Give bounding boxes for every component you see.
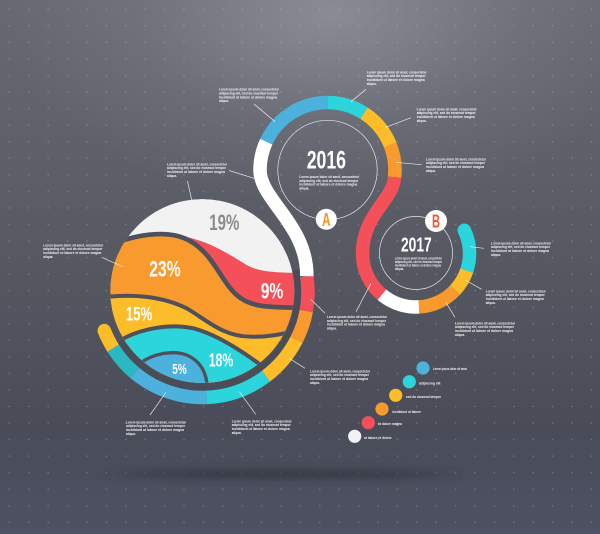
ribbon: red S-curve bbox=[362, 177, 395, 295]
text block: pie ring blue: aliqua. bbox=[126, 432, 136, 436]
text block: B yellow: adipiscing elit, sed do eiusmod tempor bbox=[486, 293, 545, 297]
badge A: A bbox=[322, 210, 331, 230]
pie chart bbox=[110, 199, 294, 383]
text block: ribbon orange 2016: incididunt ut labore et dolore magna bbox=[426, 165, 485, 169]
pie label 18%: 18% bbox=[209, 350, 234, 371]
text block: upper pie white: Lorem ipsum dolor sit amet, consectetur bbox=[167, 162, 228, 166]
text block: B yellow: Lorem ipsum dolor sit amet, consectetur bbox=[486, 289, 546, 293]
badge A bbox=[316, 209, 337, 230]
ribbon: blue bbox=[135, 373, 207, 397]
text block: ribbon yellow 2016: adipiscing elit, sed do eiusmod tempor bbox=[417, 111, 476, 115]
text block: pie ring blue: Lorem ipsum dolor sit amet, consectetur bbox=[126, 420, 187, 424]
text block: upper pie white: aliqua. bbox=[167, 174, 177, 178]
text block: ribbon red lower: adipiscing elit, sed do eiusmod tempor bbox=[327, 319, 387, 323]
text block: ribbon blue 2016: Lorem ipsum dolor sit amet, consectetur bbox=[219, 88, 280, 92]
pie separators bbox=[110, 232, 293, 383]
legend item: white: ut labore et dolore bbox=[364, 436, 392, 440]
ribbon: teal bbox=[113, 348, 135, 373]
text block: B cyan: incididunt ut labore et dolore magna bbox=[491, 249, 550, 253]
text block: B orange: aliqua. bbox=[455, 333, 465, 337]
text block: B cyan: adipiscing elit, sed do eiusmod tempor bbox=[491, 245, 551, 249]
legend item: cyan: adipiscing elit bbox=[419, 382, 441, 386]
circle B outline bbox=[380, 216, 452, 290]
text block: pie orange: adipiscing elit, sed do eiusmod tempor bbox=[43, 247, 103, 251]
text block: ribbon blue 2016: aliqua. bbox=[219, 99, 229, 103]
text block: ribbon orange 2016 bbox=[426, 157, 487, 173]
text block: pie ring blue: adipiscing elit, sed do eiusmod tempor bbox=[126, 424, 186, 428]
text block: circle B description bbox=[395, 256, 442, 271]
pie label 15%: 15% bbox=[126, 304, 152, 326]
text block: ribbon cyan 2016: incididunt ut labore et dolore magna bbox=[367, 78, 426, 82]
text block: B orange bbox=[455, 321, 516, 337]
text block: B yellow bbox=[486, 289, 546, 305]
text block: B cyan bbox=[491, 241, 552, 257]
text block: upper pie white: adipiscing elit, sed do eiusmod tempor bbox=[167, 166, 227, 170]
ribbon: yellow bbox=[266, 340, 297, 376]
ribbon: yellow start with round cap bbox=[104, 331, 113, 348]
text block: ribbon red lower bbox=[327, 315, 388, 331]
legend item: blue: Lorem ipsum dolor sit amet bbox=[433, 367, 468, 371]
text block: ribbon blue 2016: adipiscing elit, sed do eiusmod tempor bbox=[219, 92, 279, 96]
ribbon: yellow arc A bbox=[364, 113, 390, 145]
text block: pie ring blue: incididunt ut labore et dolore magna bbox=[126, 428, 185, 432]
text block: circle A description: Lorem ipsum dolor sit amet, consectetur bbox=[299, 175, 360, 179]
text block: upper pie white: incididunt ut labore et dolore magna bbox=[167, 170, 226, 174]
text block: circle B description: Lorem ipsum dolor sit amet, consectetur bbox=[395, 256, 442, 260]
ribbon: blue arc A bbox=[266, 102, 328, 142]
text block: ribbon cyan 2016 bbox=[367, 70, 427, 86]
pie label 9%: 9% bbox=[261, 278, 283, 303]
text block: pie orange bbox=[43, 243, 104, 259]
text block: pie ring cyan bbox=[232, 419, 292, 435]
text block: pie ring yellow bbox=[310, 369, 371, 385]
text block: pie ring yellow: aliqua. bbox=[310, 381, 320, 385]
text block: ribbon cyan 2016: aliqua. bbox=[367, 82, 377, 86]
continuous ribbon through both circles bbox=[104, 102, 470, 397]
pie label 23%: 23% bbox=[149, 257, 181, 282]
pie label 19%: 19% bbox=[209, 210, 239, 235]
pie segment: cyan 18% bbox=[124, 328, 259, 383]
pie segment: white 19% bbox=[110, 199, 294, 360]
text block: ribbon red lower: Lorem ipsum dolor sit amet, consectetur bbox=[327, 315, 388, 319]
ribbon: red bbox=[306, 276, 308, 311]
ribbon: orange arc B bbox=[419, 290, 455, 307]
text block: upper pie white bbox=[167, 162, 228, 178]
text block: circle A description bbox=[299, 175, 360, 191]
text block: B cyan: aliqua. bbox=[491, 253, 501, 257]
text block: B cyan: Lorem ipsum dolor sit amet, consectetur bbox=[491, 241, 552, 245]
pie segment: yellow 15% bbox=[110, 298, 284, 383]
text block: ribbon orange 2016: adipiscing elit, sed do eiusmod tempor bbox=[426, 161, 486, 165]
text block: ribbon cyan 2016: adipiscing elit, sed do eiusmod tempor bbox=[367, 74, 426, 78]
text block: circle B description: aliqua. bbox=[395, 267, 404, 271]
year 2016: 2016 bbox=[307, 146, 346, 174]
text block: B orange: incididunt ut labore et dolore magna bbox=[455, 329, 514, 333]
text block: pie ring cyan: aliqua. bbox=[232, 431, 242, 435]
text block: pie ring cyan: adipiscing elit, sed do eiusmod tempor bbox=[232, 423, 291, 427]
text block: circle A description: adipiscing elit, sed do eiusmod tempor bbox=[299, 179, 359, 183]
text block: pie ring cyan: incididunt ut labore et dolore magna bbox=[232, 427, 291, 431]
text block: ribbon blue 2016: incididunt ut labore et dolore magna bbox=[219, 95, 278, 99]
dark channel around pie bbox=[120, 270, 299, 389]
text block: B orange: adipiscing elit, sed do eiusmod tempor bbox=[455, 325, 515, 329]
badge B bbox=[425, 210, 447, 232]
text block: ribbon blue 2016 bbox=[219, 88, 280, 103]
text block: pie ring yellow: Lorem ipsum dolor sit amet, consectetur bbox=[310, 369, 371, 373]
text block: ribbon red lower: incididunt ut labore et dolore magna bbox=[327, 323, 386, 327]
text block: ribbon orange 2016: aliqua. bbox=[426, 169, 436, 173]
ground shadow bbox=[118, 470, 448, 478]
ribbon: yellow arc B bbox=[455, 271, 467, 290]
text block: B yellow: aliqua. bbox=[486, 301, 496, 305]
text block: circle A description: incididunt ut labore et dolore magna bbox=[299, 183, 358, 187]
ribbon: white arc B bbox=[382, 295, 419, 307]
text block: ribbon yellow 2016: Lorem ipsum dolor sit amet, consectetur bbox=[417, 107, 477, 111]
text block: circle B description: adipiscing elit, sed do eiusmod tempor bbox=[395, 260, 442, 264]
text block: pie orange: aliqua. bbox=[43, 255, 53, 259]
pie segment: orange 23% bbox=[110, 236, 293, 383]
text block: pie ring yellow: adipiscing elit, sed do eiusmod tempor bbox=[310, 373, 370, 377]
ribbon: cyan end with round cap bbox=[464, 230, 470, 271]
text block: pie ring yellow: incididunt ut labore et dolore magna bbox=[310, 377, 369, 381]
text block: ribbon yellow 2016: incididunt ut labore et dolore magna bbox=[417, 115, 476, 119]
ribbon: cyan bbox=[207, 376, 266, 397]
ribbon: white S-curve bbox=[260, 142, 307, 276]
text block: ribbon cyan 2016: Lorem ipsum dolor sit amet, consectetur bbox=[367, 70, 427, 74]
text block: B orange: Lorem ipsum dolor sit amet, consectetur bbox=[455, 321, 516, 325]
text block: ribbon yellow 2016 bbox=[417, 107, 477, 123]
text block: pie ring blue bbox=[126, 420, 187, 436]
legend item: yellow: sed do eiusmod tempor bbox=[406, 395, 442, 399]
text block: pie orange: incididunt ut labore et dolore magna bbox=[43, 251, 102, 255]
text block: circle A description: aliqua. bbox=[299, 187, 309, 191]
text block: ribbon red lower: aliqua. bbox=[327, 327, 337, 331]
pie label 5%: 5% bbox=[172, 361, 187, 378]
legend item: red: ut dolore magna bbox=[378, 422, 403, 426]
pie segment: red 9% bbox=[188, 237, 303, 308]
leader lines bbox=[102, 89, 484, 415]
text block: circle B description: incididunt ut labore et dolore magna bbox=[395, 263, 442, 267]
ribbon: orange bbox=[297, 311, 306, 340]
legend item: orange: incididunt ut labore bbox=[392, 410, 421, 414]
year 2017: 2017 bbox=[401, 235, 432, 257]
circle A outline bbox=[278, 120, 377, 220]
pie segment: blue 5% bbox=[144, 354, 206, 383]
text block: pie orange: Lorem ipsum dolor sit amet, consectetur bbox=[43, 243, 104, 247]
text block: B yellow: incididunt ut labore et dolore magna bbox=[486, 297, 545, 301]
text block: pie ring cyan: Lorem ipsum dolor sit amet, consectetur bbox=[232, 419, 292, 423]
badge B: B bbox=[432, 212, 440, 232]
text block: ribbon orange 2016: Lorem ipsum dolor sit amet, consectetur bbox=[426, 157, 487, 161]
ribbon: cyan arc A bbox=[328, 102, 364, 113]
text block: ribbon yellow 2016: aliqua. bbox=[417, 119, 427, 123]
ribbon: orange arc A bbox=[390, 145, 395, 177]
legend bbox=[348, 361, 468, 443]
